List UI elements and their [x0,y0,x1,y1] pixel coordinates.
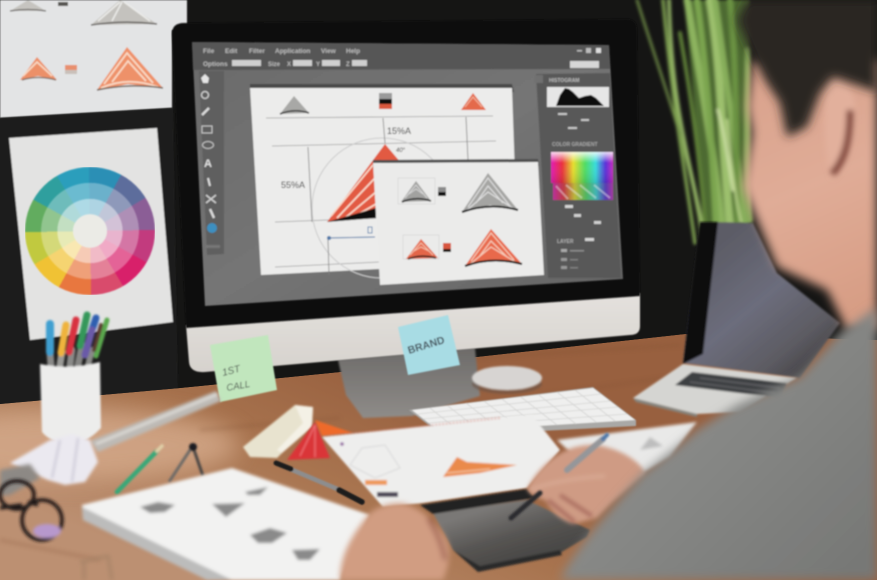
icon: small grey pyramid [398,178,446,204]
monitor [172,19,640,372]
designer figure, out of focus [560,0,877,580]
glasses [0,481,62,540]
designer's right hand with stylus [511,435,646,524]
application menu bar: X [287,62,291,68]
logo sketches [140,487,320,560]
stylus [511,435,607,518]
application menu bar: Application [275,48,310,55]
monitor black bezel [172,19,640,328]
chart: colour wheel [25,167,155,295]
panel: editor screen [192,42,623,306]
sticky note: 1st call: 1ST [221,364,242,379]
sticky note: 1st call: CALL [226,379,251,394]
icon: large orange pyramid [97,47,163,90]
application menu bar: Y [316,62,320,68]
icon: large orange pyramid [465,229,522,266]
neck and face [743,60,877,330]
right side panel [535,73,621,278]
application menu bar: View [321,48,337,55]
application menu bar: Help [346,48,360,55]
application menu bar: Filter [249,48,265,55]
label: 55%A: 55%A [281,180,305,190]
hand [527,445,646,524]
right sketch paper [557,422,697,480]
sticky note: brand [398,315,460,375]
compass [169,443,203,482]
preview window with logo variants [373,159,544,285]
orange colour chip [365,480,387,485]
application menu bar: Z [346,62,350,68]
green pencil [117,446,162,492]
sketchbook [82,468,370,580]
sticky note: 1st call [210,335,277,402]
panel: upper reference poster [0,0,187,118]
monitor stand [338,348,480,418]
drawing window: construction grid: 40° [396,148,406,154]
orange paper sketch [443,457,517,477]
grey object behind glasses [0,464,40,496]
drawing tablet [420,489,590,572]
laptop [633,222,840,417]
icon: large grey pyramid [462,173,518,212]
icon: small orange pyramid [461,93,486,110]
sketch paper [322,415,560,507]
application menu bar: File [203,48,215,55]
application menu bar [192,42,610,70]
label: 15%A: 15%A [387,126,411,136]
sticky note: brand: BRAND [406,334,447,357]
icon: large grey pyramid at top [91,0,157,25]
panel: colour wheel poster [0,108,178,405]
icon: small grey pyramid at top [10,0,68,11]
laptop base and keyboard [633,364,797,417]
histogram chart [547,87,609,107]
application menu bar: Edit [225,48,238,55]
tool palette [199,71,224,255]
right side panel: COLOR GRADIENT [552,142,598,148]
designer's left hand [340,503,449,580]
right side panel: HISTOGRAM [549,78,579,84]
eraser block [243,405,313,458]
plant: green leaves behind the laptop [637,0,752,243]
icon: small grey pyramid [280,96,309,114]
keyboard [409,387,636,436]
drawing window: construction grid [250,84,518,278]
tool palette: A [204,158,212,170]
desk surface [0,334,877,580]
hair [737,0,877,137]
crumpled paper [10,434,98,485]
colour gradient swatch [551,152,613,200]
main orange pyramid [327,144,402,222]
coloured markers [50,315,107,365]
faint object on desk [80,556,112,580]
laptop display [683,222,840,378]
icon: small orange pyramid [403,235,451,259]
marker pen [276,463,362,502]
grey shirt [560,307,877,580]
monitor silver chin [186,293,640,372]
application menu bar: Size [268,62,281,68]
application menu bar: Options [203,61,228,68]
ear [825,79,855,178]
dark colour chip [377,492,398,497]
dark wall background [0,0,877,420]
pencil cup [40,315,107,444]
red paper fan model [287,420,353,460]
right side panel: LAYER [557,239,574,245]
icon: small orange pyramid [20,57,77,80]
icon: colour swatch [379,93,392,109]
mouse [472,366,542,394]
ruler [90,391,221,452]
